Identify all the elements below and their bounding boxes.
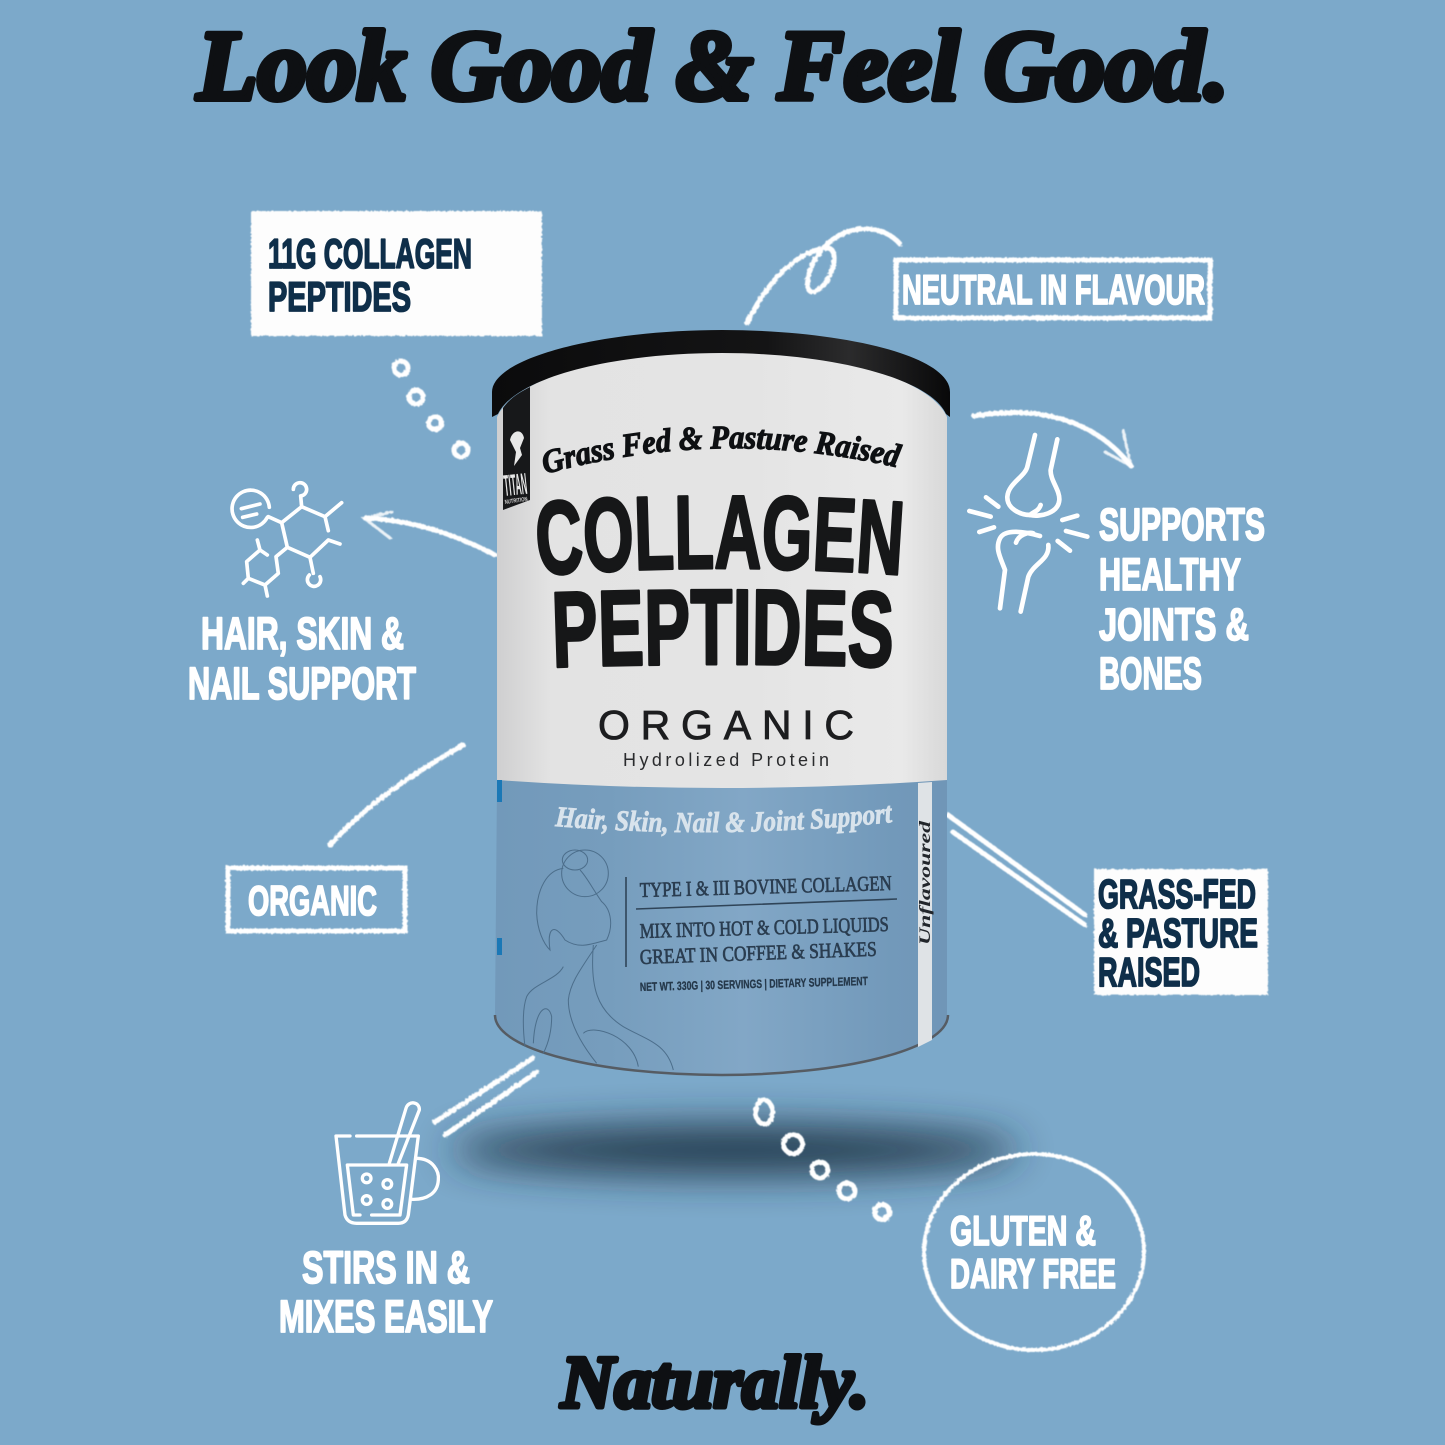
callout: 11g collagen peptides (251, 211, 542, 336)
dotted connector: collagen (394, 361, 468, 457)
can text: peptides: PEPTIDES (554, 588, 892, 669)
text: stirs in and mixes easily (279, 1242, 493, 1342)
brand tag (502, 387, 530, 510)
callout: 11g collagen peptides: PEPTIDES (268, 273, 411, 320)
can text: mix into: MIX INTO HOT & COLD LIQUIDS (639, 912, 889, 943)
icon: molecule (232, 483, 342, 596)
can text: great in coffee: GREAT IN COFFEE & SHAKES (639, 937, 877, 969)
can body white label (497, 350, 947, 800)
callout: gluten and dairy free: DAIRY FREE (950, 1250, 1116, 1297)
can text: divider lines (626, 877, 897, 967)
text: stirs in and mixes easily: MIXES EASILY (279, 1291, 493, 1342)
callout: grass-fed and pasture raised: GRASS-FED (1098, 871, 1256, 917)
callout: organic (228, 868, 405, 931)
callout: organic: ORGANIC (248, 877, 377, 924)
text: hair skin and nail support (188, 608, 416, 709)
can text: net weight: NET WT. 330G | 30 SERVINGS | DIETARY SUPPLEMENT (640, 974, 868, 994)
text: stirs in and mixes easily: STIRS IN & (302, 1242, 470, 1293)
arrow: to hair skin nail (364, 512, 495, 555)
title: Look Good & Feel Good. (196, 10, 1229, 121)
closing tagline: Naturally. (560, 1342, 869, 1424)
product can (492, 330, 950, 1076)
white vertical stripe (918, 782, 932, 1047)
callout: neutral in flavour: NEUTRAL IN FLAVOUR (902, 266, 1205, 313)
text: supports healthy joints and bones: SUPPORTS (1099, 499, 1265, 550)
arrow: mixes double stroke (435, 1058, 537, 1135)
blue edge accents (497, 780, 502, 955)
callout: gluten and dairy free: GLUTEN & (950, 1207, 1096, 1254)
text: supports healthy joints and bones: HEALTHY (1099, 549, 1241, 600)
text: supports healthy joints and bones: JOINTS & (1099, 599, 1249, 650)
callout: 11g collagen peptides: 11G COLLAGEN (268, 230, 472, 277)
can text: collagen: COLLAGEN (537, 494, 903, 576)
can text: type i and iii: TYPE I & III BOVINE COLLAGEN (639, 871, 892, 902)
brand tag: NUTRITION (504, 497, 528, 506)
icon: woman line art (523, 850, 673, 1070)
can text: unflavoured: Unflavoured (917, 820, 934, 945)
callout: neutral in flavour (896, 260, 1210, 318)
product can: TITAN (502, 468, 529, 503)
arrow: grass-fed double stroke (948, 815, 1085, 925)
callout: grass-fed and pasture raised: RAISED (1098, 949, 1200, 995)
can text: hydrolized protein: Hydrolized Protein (623, 750, 829, 770)
icon: joint (969, 435, 1087, 612)
dotted connector: gluten (756, 1100, 890, 1220)
text: hair skin and nail support: NAIL SUPPORT (188, 658, 416, 709)
can text: organic: ORGANIC (598, 702, 854, 748)
callout: grass-fed and pasture raised: & PASTURE (1098, 910, 1258, 956)
can lid (492, 330, 950, 417)
arrow: neutral in flavour squiggle (747, 229, 900, 323)
can text: hair skin nail joint: Hair, Skin, Nail & Joint Support (554, 806, 893, 837)
text: hair skin and nail support: HAIR, SKIN & (201, 608, 404, 659)
can bottom rim (495, 1015, 948, 1075)
text: supports healthy joints and bones: BONES (1099, 648, 1202, 699)
icon: cup with spoon (336, 1103, 438, 1223)
can text: grass fed: Grass Fed & Pasture Raised (542, 426, 904, 473)
arrow: organic stroke (330, 745, 463, 845)
arrow: to joints (974, 413, 1131, 466)
can blue label (495, 780, 947, 1075)
callout: grass-fed and pasture raised (1094, 869, 1268, 995)
text: supports healthy joints and bones (1099, 499, 1265, 699)
can shadow (450, 1126, 1020, 1174)
callout: gluten and dairy free (924, 1154, 1144, 1350)
